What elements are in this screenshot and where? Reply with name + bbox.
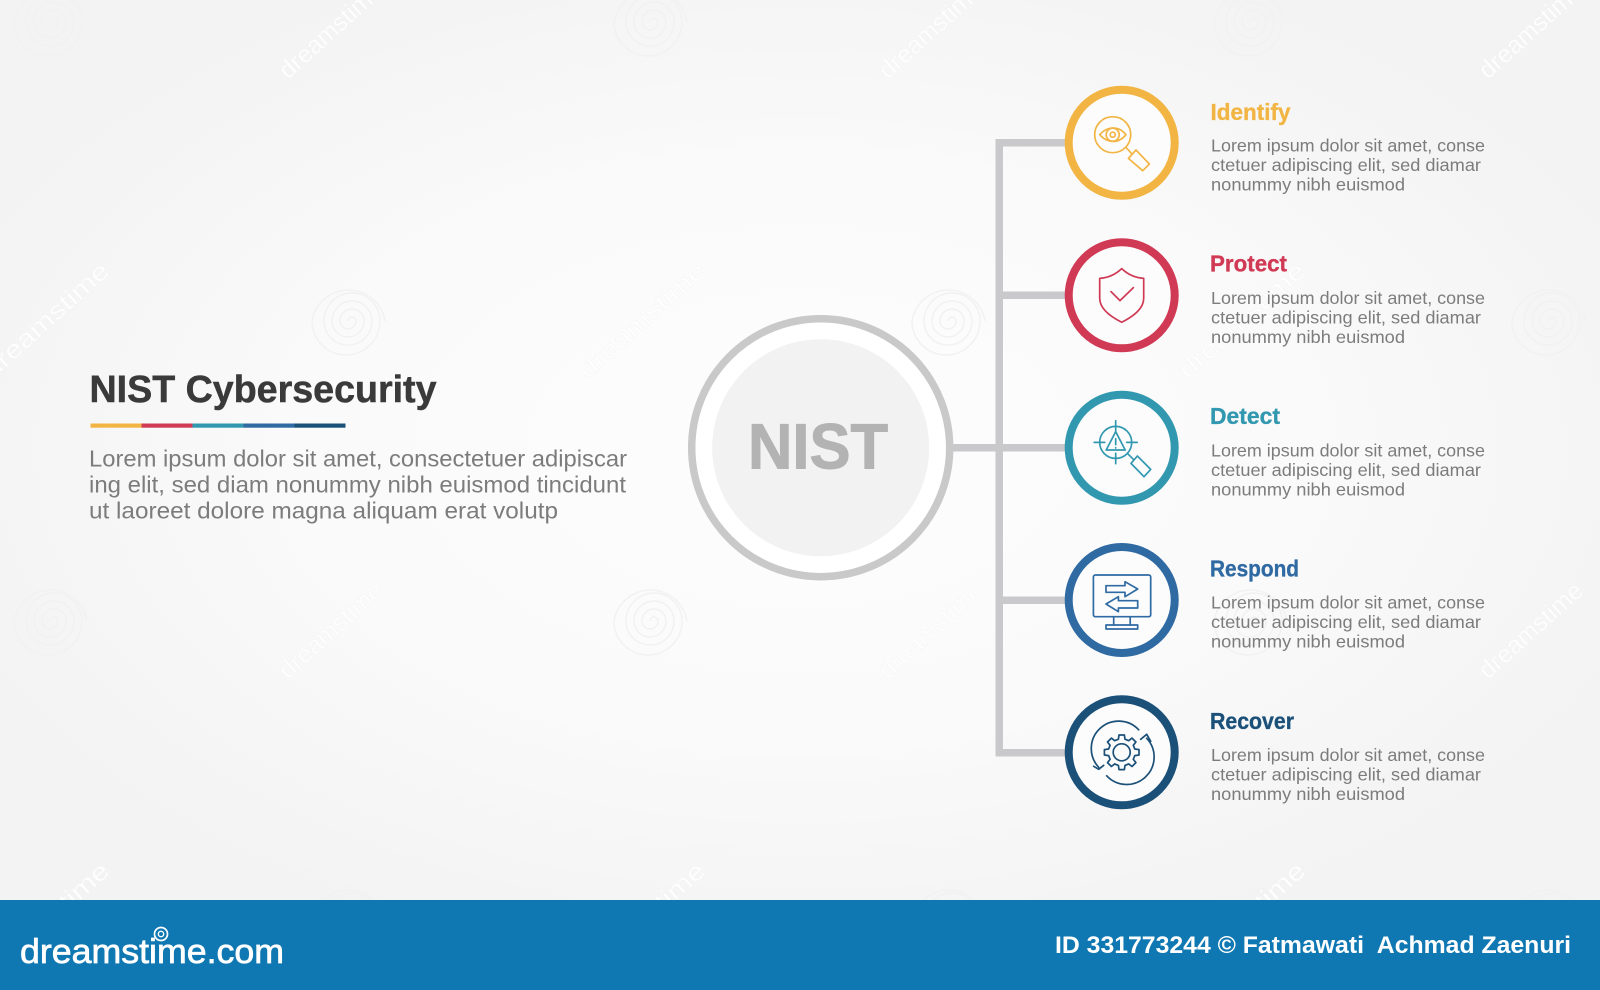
description: Respond: nonummy nibh euismod <box>1211 632 1405 652</box>
description: Recover: nonummy nibh euismod <box>1211 784 1405 804</box>
description: Respond: ctetuer adipiscing elit, sed diamar <box>1211 612 1481 632</box>
intro paragraph: ing elit, sed diam nonummy nibh euismod tincidunt <box>89 472 627 498</box>
description: Detect: Lorem ipsum dolor sit amet, conse <box>1211 441 1485 461</box>
icon: gear with cycle arrows <box>1069 699 1175 805</box>
description: Detect <box>1211 441 1485 500</box>
heading: Recover: Recover <box>1210 708 1294 734</box>
watermark pattern: dreamstime <box>1173 257 1311 384</box>
description: Protect <box>1211 288 1485 347</box>
item: Recover <box>1069 699 1485 805</box>
watermark pattern: dreamstime <box>573 857 711 984</box>
watermark pattern: dreamstime <box>873 577 989 684</box>
description: Identify: nonummy nibh euismod <box>1211 175 1405 195</box>
description: Protect: ctetuer adipiscing elit, sed diamar <box>1211 308 1481 328</box>
intro paragraph: ut laoreet dolore magna aliquam erat volutp <box>89 498 558 524</box>
central NIST circle <box>692 319 950 577</box>
icon: eye magnifier <box>1069 90 1175 196</box>
description: Respond <box>1211 592 1485 652</box>
item: Identify <box>1069 90 1485 196</box>
description: Detect: nonummy nibh euismod <box>1211 480 1405 500</box>
footer logo: dreamstime.com <box>20 933 284 971</box>
description: Identify <box>1211 136 1485 195</box>
connector lines <box>950 139 1068 756</box>
description: Recover: ctetuer adipiscing elit, sed diamar <box>1211 764 1481 784</box>
description: Protect: Lorem ipsum dolor sit amet, conse <box>1211 288 1485 308</box>
heading: Detect: Detect <box>1210 403 1280 429</box>
description: Identify: Lorem ipsum dolor sit amet, conse <box>1211 136 1485 156</box>
item: Protect <box>1069 242 1485 348</box>
title: NIST Cybersecurity <box>90 369 436 411</box>
heading: Respond: Respond <box>1210 556 1299 582</box>
icon: monitor with arrows <box>1069 547 1175 653</box>
watermark pattern: dreamstime <box>273 577 389 684</box>
watermark pattern: dreamstime <box>1173 857 1311 984</box>
item: Detect <box>1069 395 1485 501</box>
intro paragraph <box>89 446 627 524</box>
heading: Protect: Protect <box>1210 250 1287 276</box>
title underline: five colour segments <box>90 424 346 428</box>
icon: shield check <box>1069 242 1175 348</box>
icon: target magnifier with warning <box>1069 395 1175 501</box>
central NIST circle: NIST <box>748 410 888 482</box>
item: Respond <box>1069 547 1485 653</box>
footer credit: ID 331773244 © Fatmawati Achmad Zaenuri <box>1055 932 1571 959</box>
description: Identify: ctetuer adipiscing elit, sed diamar <box>1211 155 1481 175</box>
description: Protect: nonummy nibh euismod <box>1211 327 1405 347</box>
footer bar <box>0 900 1600 990</box>
heading: Identify: Identify <box>1210 99 1291 125</box>
watermark pattern: dreamstime <box>573 257 711 384</box>
description: Recover: Lorem ipsum dolor sit amet, conse <box>1211 745 1485 765</box>
description: Respond: Lorem ipsum dolor sit amet, conse <box>1211 592 1485 612</box>
description: Recover <box>1211 745 1485 804</box>
intro paragraph: Lorem ipsum dolor sit amet, consectetuer adipiscar <box>89 446 627 472</box>
description: Detect: ctetuer adipiscing elit, sed diamar <box>1211 460 1481 480</box>
watermark pattern: dreamstime <box>1473 577 1589 684</box>
